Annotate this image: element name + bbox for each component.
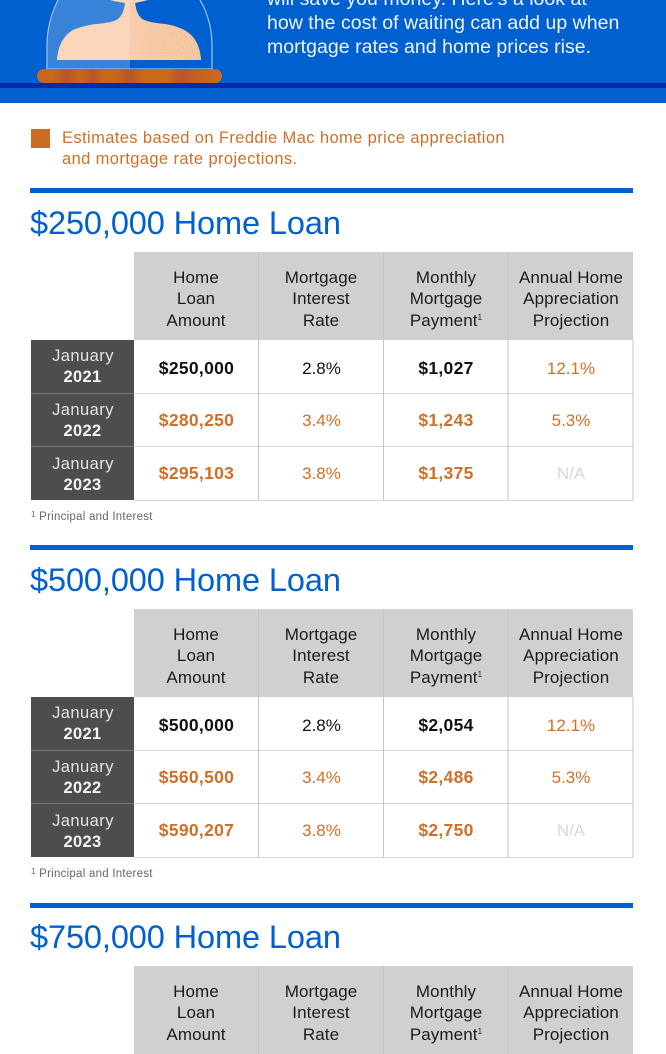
table: $560,500: [159, 767, 234, 787]
table header: Monthly: [416, 982, 477, 1001]
table: $2,054: [418, 715, 474, 735]
intro text: [266, 0, 619, 58]
table: 5.3%: [552, 411, 590, 430]
table header: Payment: [410, 1025, 478, 1044]
table: Loan: [177, 289, 215, 308]
panel: $500,000 loan: [30, 545, 633, 880]
table: 2023: [64, 476, 101, 494]
table: Annual Home: [519, 268, 623, 287]
table: 12.1%: [547, 359, 595, 378]
table: 5.3%: [552, 768, 590, 787]
legend note: Estimates based on Freddie Mac home price appreciation: [62, 129, 505, 147]
table: 3.4%: [302, 768, 341, 787]
table: Projection: [533, 311, 609, 330]
table: Amount: [166, 311, 226, 330]
heading: $250,000 Home Loan: [30, 205, 341, 241]
table: 2022: [64, 779, 101, 797]
table header: Appreciation: [523, 1003, 619, 1022]
table: $295,103: [159, 463, 234, 483]
table: 3.8%: [302, 821, 341, 840]
table: Rate: [303, 311, 339, 330]
panel: $750,000 loan: [30, 903, 633, 1054]
heading: $500,000 Home Loan: [30, 562, 341, 598]
table: Appreciation: [523, 646, 619, 665]
table: [31, 609, 633, 858]
table: N/A: [557, 464, 586, 483]
table: Home: [173, 268, 219, 287]
heading: $750,000 Home Loan: [30, 919, 341, 955]
table header: Mortgage: [285, 982, 357, 1001]
table: Monthly: [416, 268, 477, 287]
footnote: Principal and Interest: [36, 868, 153, 880]
footnote: 1: [31, 510, 36, 519]
table: Home: [173, 625, 219, 644]
table header: Rate: [303, 1025, 339, 1044]
table: Monthly: [416, 625, 477, 644]
table: Mortgage: [410, 646, 482, 665]
table: January: [52, 347, 114, 365]
table: $2,486: [418, 767, 474, 787]
table: [31, 252, 633, 500]
table: January: [52, 812, 114, 830]
table: Amount: [166, 668, 226, 687]
table header: Home: [173, 982, 219, 1001]
table: Rate: [303, 668, 339, 687]
table: $280,250: [159, 410, 234, 430]
table: 1: [478, 313, 483, 322]
table: January: [52, 758, 114, 776]
icon: hourglass: [37, 0, 222, 83]
table header: Loan: [177, 1003, 215, 1022]
table header: [134, 966, 633, 1054]
table header: 1: [478, 1027, 483, 1036]
table header: Interest: [292, 1003, 350, 1022]
table: Mortgage: [410, 289, 482, 308]
table header: Annual Home: [519, 982, 623, 1001]
table: Mortgage: [285, 625, 357, 644]
table: N/A: [557, 821, 586, 840]
table: $1,243: [418, 410, 474, 430]
table: 2.8%: [302, 359, 341, 378]
table: 2023: [64, 833, 101, 851]
table: January: [52, 401, 114, 419]
table: $500,000: [159, 715, 234, 735]
footnote: 1: [31, 867, 36, 876]
table: 12.1%: [547, 716, 595, 735]
table header: Projection: [533, 1025, 609, 1044]
intro text: mortgage rates and home prices rise.: [267, 36, 591, 58]
table: Payment: [410, 311, 478, 330]
table: January: [52, 704, 114, 722]
table: January: [52, 455, 114, 473]
table: $590,207: [159, 820, 234, 840]
table: Appreciation: [523, 289, 619, 308]
table: $250,000: [159, 358, 234, 378]
table: 2021: [64, 725, 101, 743]
table header: Mortgage: [410, 1003, 482, 1022]
table: Loan: [177, 646, 215, 665]
table: 2022: [64, 422, 101, 440]
table: $2,750: [418, 820, 474, 840]
table: Annual Home: [519, 625, 623, 644]
table: Payment: [410, 668, 478, 687]
table: Interest: [292, 289, 350, 308]
legend note: and mortgage rate projections.: [62, 150, 298, 168]
panel: $250,000 loan: [30, 188, 633, 523]
table: 2021: [64, 368, 101, 386]
legend note: [31, 129, 505, 168]
table header: Amount: [166, 1025, 226, 1044]
table: Interest: [292, 646, 350, 665]
hero banner: [0, 0, 666, 103]
table: 1: [478, 670, 483, 679]
table: Mortgage: [285, 268, 357, 287]
table: 3.8%: [302, 464, 341, 483]
footnote: Principal and Interest: [36, 511, 153, 523]
table: 2.8%: [302, 716, 341, 735]
table: $1,375: [418, 463, 474, 483]
table: $1,027: [418, 358, 474, 378]
intro text: how the cost of waiting can add up when: [267, 12, 619, 34]
table: 3.4%: [302, 411, 341, 430]
table: Projection: [533, 668, 609, 687]
